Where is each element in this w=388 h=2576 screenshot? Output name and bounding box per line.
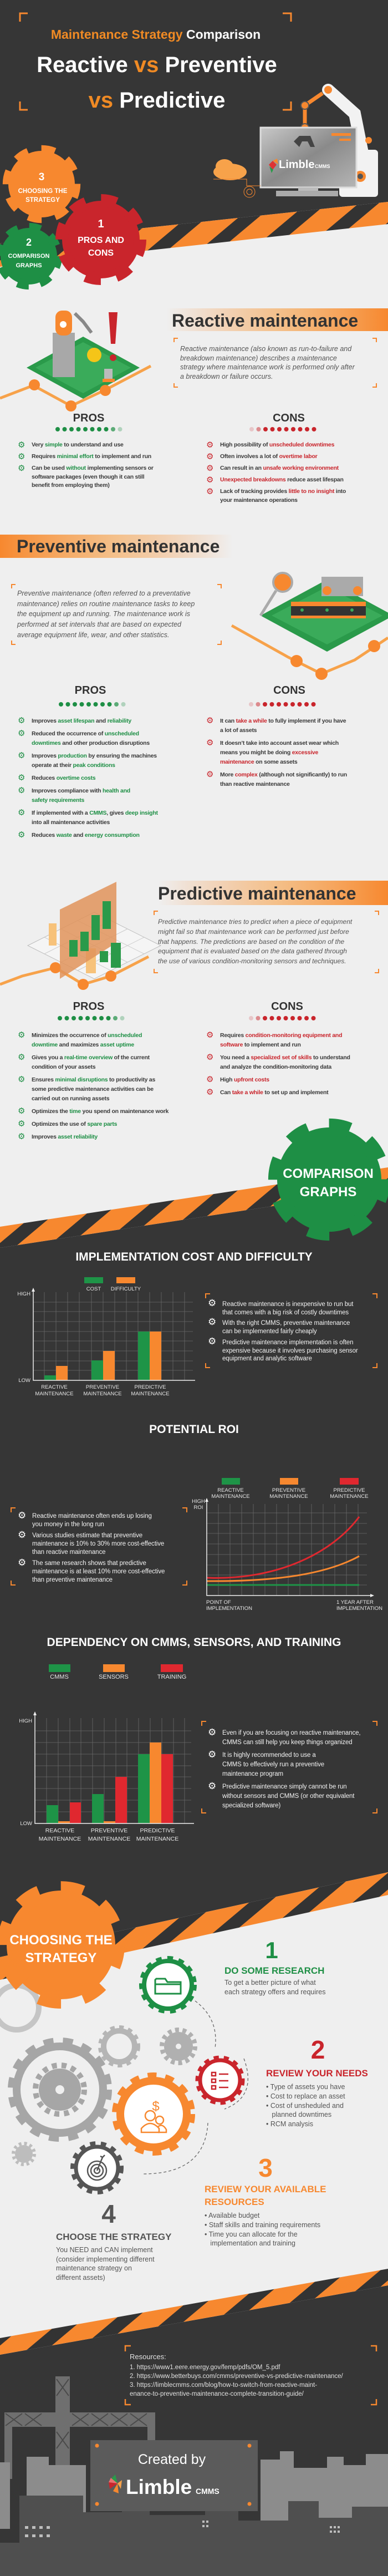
list: predictive pros: Minimizes the occurrence of unscheduled	[32, 1032, 142, 1039]
step 3: review your available resources	[205, 2153, 326, 2247]
callout: ROI notes: you money in the long run	[32, 1521, 104, 1528]
list: predictive pros: some predictive maintenance activities can be	[32, 1086, 154, 1093]
line chart: potential ROI: IMPLEMENTATION	[336, 1605, 382, 1612]
line chart: potential ROI: MAINTENANCE	[330, 1493, 369, 1500]
callout: dependency notes: specialized software)	[222, 1802, 280, 1809]
step 1: do some research	[224, 1937, 326, 1996]
line chart: potential ROI: PREVENTIVE	[272, 1487, 305, 1493]
step 3: review your available resources: 3	[258, 2153, 273, 2182]
dark header region	[0, 0, 388, 243]
bar chart: dependency on CMMS, sensors, training: REACTIVE	[45, 1827, 74, 1834]
list: preventive pros: Reduces overtime costs	[32, 775, 95, 781]
bar chart: dependency on CMMS, sensors, training: PREVENTIVE	[91, 1827, 127, 1834]
list: reactive cons: Unexpected breakdowns reduce asset lifespan	[220, 476, 344, 483]
text: reactive description: strategy where maintenance work is performed only after	[180, 363, 355, 371]
gear: comparison graphs (2): 2	[26, 237, 32, 248]
sign: created by Limble CMMS	[90, 2440, 258, 2511]
list: predictive pros: carried out on running assets	[32, 1095, 109, 1102]
step 1: do some research: each strategy offers and requires	[224, 1988, 326, 1996]
dots: predictive pros/cons	[58, 1016, 316, 1020]
list: preventive cons: It can take a while to fully implement if you have	[220, 718, 346, 724]
hazard stripe band 2	[0, 1167, 388, 1248]
list: preventive pros: into all maintenance activities	[32, 819, 110, 826]
bar chart: dependency on CMMS, sensors, training: HIGH	[19, 1718, 32, 1724]
heading bar: predictive	[158, 881, 388, 905]
list: predictive pros: downtime and maximizes asset uptime	[32, 1041, 134, 1048]
list: predictive pros: Gives you a real-time overview of the current	[32, 1054, 150, 1061]
step 4: choose the strategy	[56, 2199, 172, 2282]
callout: ROI notes: Various studies estimate that preventive	[32, 1532, 142, 1539]
callout: implementation notes: With the right CMMS, preventive maintenance	[222, 1320, 350, 1327]
text: predictive description: the use of various condition-monitoring sensors and techniques.	[158, 957, 346, 965]
callout: implementation notes: equipment and analytic software	[222, 1355, 312, 1362]
text: preventive description: maintenance) relies on routine maintenance tasks to keep	[17, 600, 195, 608]
list: preventive pros: Reduced the occurrence of unscheduled	[32, 730, 139, 737]
gear: pros and cons (1): CONS	[88, 248, 114, 258]
callout: implementation notes: that comes with a big risk of costly downtimes	[222, 1309, 349, 1316]
decorative gray gears: strategy	[0, 1985, 195, 2165]
list: reactive pros: software packages (even though it can still	[32, 474, 144, 480]
step 1: do some research: 1	[265, 1937, 278, 1963]
line chart: potential ROI: REACTIVE	[217, 1487, 244, 1493]
gear: comparison graphs (2): GRAPHS	[16, 262, 42, 269]
sign: created by Limble CMMS: CMMS	[196, 2487, 219, 2496]
text: reactive description	[180, 345, 355, 380]
gear: choosing the strategy (3): STRATEGY	[25, 197, 60, 204]
line chart: potential ROI: ROI	[194, 1505, 203, 1511]
step 2: review your needs: 2	[311, 2035, 325, 2064]
resources brackets	[125, 2346, 376, 2405]
list: preventive cons: a lot of assets	[220, 727, 257, 734]
callout: ROI notes	[19, 1512, 165, 1583]
step 4: choose the strategy: You NEED and CAN implement	[56, 2246, 153, 2254]
gear: choosing the strategy: STRATEGY	[25, 1950, 96, 1965]
callout: implementation notes: can be implemented fairly cheaply	[222, 1328, 317, 1335]
step 4: choose the strategy: different assets)	[56, 2274, 105, 2282]
callout: dependency notes: maintenance program	[222, 1771, 283, 1777]
heading: preventive cons: CONS	[273, 684, 305, 697]
gear: choosing the strategy	[6, 1890, 116, 2000]
list: reactive cons: Can result in an unsafe working environment	[220, 465, 339, 471]
list: preventive cons: More complex (although not significantly) to run	[220, 771, 347, 778]
callout: dependency notes	[208, 1728, 361, 1809]
description brackets: predictive	[154, 911, 379, 973]
gear: comparison graphs: COMPARISON	[283, 1166, 374, 1181]
text: predictive description: equipment that is evaluated based on the data gathered through	[158, 947, 347, 955]
list: reactive cons: High possibility of unscheduled downtimes	[220, 441, 334, 448]
list: predictive cons: software to implement and run	[220, 1041, 301, 1048]
callout: ROI notes: The same research shows that predictive	[32, 1560, 146, 1567]
title: maintenance strategy comparison: Maintenance Strategy Comparison	[51, 27, 261, 42]
illustration: robot arm and monitor	[213, 86, 378, 197]
list: predictive pros: condition of your assets	[32, 1064, 95, 1070]
step 4: choose the strategy: CHOOSE THE STRATEGY	[56, 2232, 171, 2242]
text: resources: Resources:	[130, 2353, 166, 2361]
step 2: review your needs: REVIEW YOUR NEEDS	[266, 2068, 368, 2079]
bar chart: dependency on CMMS, sensors, training: MAINTENANCE	[136, 1836, 178, 1842]
bar chart: implementation cost and difficulty: HIGH	[17, 1291, 30, 1297]
heading bar: preventive	[0, 535, 233, 558]
callout: ROI notes: maintenance is at least 10% more cost-effective	[32, 1568, 165, 1575]
callout: ROI notes: Reactive maintenance often ends up losing	[32, 1513, 152, 1520]
bar chart: implementation cost and difficulty: COST	[86, 1286, 101, 1292]
heading: predictive cons: CONS	[271, 1000, 303, 1013]
illustration: predictive chart	[0, 882, 161, 990]
step 2: review your needs	[266, 2035, 368, 2128]
callout: dependency notes: CMMS can still help you keep things organized	[222, 1739, 353, 1746]
line chart: potential ROI: MAINTENANCE	[269, 1493, 308, 1500]
list: preventive pros: Improves production by ensuring the machines	[32, 753, 157, 759]
bar chart: implementation cost and difficulty: MAINTENANCE	[131, 1391, 170, 1397]
hazard stripe band 3	[0, 1872, 388, 1980]
chart title: potential ROI: POTENTIAL ROI	[149, 1423, 239, 1436]
icon: choose strategy gear (target)	[73, 2144, 121, 2192]
callout: dependency notes: It is highly recommended to use a	[222, 1752, 316, 1759]
list: preventive cons: than reactive maintenance	[220, 781, 290, 787]
icon: review needs gear (red checklist)	[198, 2058, 242, 2102]
list: preventive pros: safety requirements	[32, 797, 84, 804]
text: preventive description: performed at set intervals that are based on expected	[17, 621, 181, 628]
hazard stripe band 4	[0, 2269, 388, 2355]
callout: dependency notes: Even if you are focusing on reactive maintenance,	[222, 1730, 361, 1736]
step 2: review your needs: • Cost to replace an asset	[266, 2092, 345, 2100]
text: resources	[130, 2353, 343, 2397]
list: reactive pros	[18, 441, 154, 489]
chart title: dependency: DEPENDENCY ON CMMS, SENSORS, AND TRAINING	[47, 1636, 341, 1649]
list: predictive pros: Optimizes the time you spend on maintenance work	[32, 1108, 169, 1115]
line chart: potential ROI: POINT OF	[206, 1599, 231, 1605]
list: predictive cons: You need a specialized set of skills to understand	[220, 1054, 350, 1061]
text: reactive description: a breakdown or failure occurs.	[180, 373, 273, 380]
list: predictive cons: High upfront costs	[220, 1076, 269, 1083]
illustration: reactive robot	[0, 311, 151, 411]
bar chart: dependency on CMMS, sensors, training: MAINTENANCE	[39, 1836, 81, 1842]
line chart: potential ROI	[192, 1478, 382, 1612]
title: reactive vs preventive vs predictive: vs Predictive	[89, 88, 225, 113]
illustration: preventive conveyor	[232, 573, 388, 680]
callout: implementation notes	[208, 1299, 358, 1362]
line chart: potential ROI: IMPLEMENTATION	[206, 1605, 252, 1612]
bar chart: dependency on CMMS, sensors, training	[19, 1664, 194, 1842]
step 3: review your available resources: • Time you can allocate for the	[205, 2230, 298, 2238]
heading: reactive cons: CONS	[273, 412, 305, 424]
text: reactive description: Reactive maintenance (also known as run-to-failure and	[180, 345, 351, 353]
list: predictive cons: Can take a while to set up and implement	[220, 1089, 328, 1096]
icon: research gear (green folder)	[142, 1959, 194, 2011]
text: preventive description: Preventive maintenance (often referred to a preventative	[17, 590, 191, 597]
bar chart: dependency on CMMS, sensors, training: LOW	[20, 1821, 32, 1827]
list: predictive cons	[207, 1032, 350, 1096]
step 2: review your needs: • Cost of unsheduled and	[266, 2102, 344, 2110]
callout: ROI notes: than reactive maintenance	[32, 1549, 105, 1556]
bar chart: dependency on CMMS, sensors, training: MAINTENANCE	[88, 1836, 130, 1842]
title corner brackets	[20, 13, 291, 110]
text: predictive description: might fail so that maintenance work can be performed just before	[158, 928, 349, 936]
illustration: robot arm and monitor: Limble	[279, 159, 314, 171]
list: preventive pros: Improves asset lifespan and reliability	[32, 718, 131, 724]
step 3: review your available resources: REVIEW YOUR AVAILABLE	[205, 2184, 326, 2194]
step 2: review your needs: • RCM analysis	[266, 2120, 313, 2128]
bar chart: implementation cost and difficulty: PREDICTIVE	[134, 1384, 166, 1390]
text: resources: enance-to-preventive-maintenance-complete-transition-guide/	[130, 2391, 304, 2397]
gear: choosing the strategy (3): CHOOSING THE	[18, 188, 68, 195]
step 3: review your available resources: • Staff skills and training requirements	[205, 2221, 320, 2229]
step 3: review your available resources: RESOURCES	[205, 2197, 264, 2207]
list: reactive cons: Often involves a lot of overtime labor	[220, 453, 317, 460]
sign: created by Limble CMMS: Limble	[126, 2476, 192, 2498]
gear: pros and cons (1): 1	[98, 218, 104, 230]
list: reactive cons	[207, 441, 346, 504]
gear: pros and cons (1)	[62, 201, 140, 278]
list: preventive pros: operate at their peak conditions	[32, 762, 115, 769]
line chart: potential ROI: HIGH	[192, 1498, 205, 1505]
icon: resources gear (orange people)	[116, 2076, 191, 2152]
illustration: robot arm and monitor: CMMS	[315, 164, 330, 169]
text: preventive description: the equipment up and running. The maintenance work is	[17, 610, 190, 618]
gear: comparison graphs	[277, 1127, 382, 1232]
bar chart: implementation cost and difficulty: MAINTENANCE	[83, 1391, 122, 1397]
list: predictive pros: Optimizes the use of spare parts	[32, 1121, 117, 1127]
heading: reactive pros: PROS	[73, 412, 104, 424]
list: reactive cons: your maintenance operations	[220, 497, 298, 504]
heading: reactive maintenance: Reactive maintenance	[172, 311, 358, 331]
gear: choosing the strategy: CHOOSING THE	[9, 1933, 113, 1948]
chart title: implementation cost and difficulty: IMPLEMENTATION COST AND DIFFICULTY	[75, 1251, 313, 1263]
callout brackets: ROI	[11, 1508, 187, 1585]
arrows: dashed flow between steps	[143, 2001, 248, 2174]
list: preventive pros	[18, 717, 158, 839]
list: preventive cons: maintenance on some assets	[220, 759, 297, 765]
list: predictive pros: Ensures minimal disruptions to productivity as	[32, 1076, 155, 1083]
description brackets: reactive	[174, 338, 376, 387]
step 2: review your needs: planned downtimes	[272, 2111, 331, 2118]
heading bar: reactive	[166, 308, 388, 331]
list: reactive pros: benefit from employing them)	[32, 482, 110, 489]
text: preventive description: average equipment life, wear, and other statistics.	[17, 631, 169, 639]
list: reactive pros: Very simple to understand and use	[32, 441, 124, 448]
list: preventive pros: Improves compliance with health and	[32, 787, 130, 794]
bar chart: dependency on CMMS, sensors, training: TRAINING	[157, 1674, 186, 1680]
bar chart: dependency on CMMS, sensors, training: CMMS	[50, 1674, 69, 1680]
list: preventive cons: means you might be doing excessive	[220, 749, 318, 756]
list: preventive pros: Reduces waste and energy consumption	[32, 832, 140, 839]
text: resources: 1. https://www1.eere.energy.gov/femp/pdfs/OM_5.pdf	[130, 2364, 280, 2371]
text: predictive description: that happens. The predictions are based on the condition of the	[158, 938, 344, 946]
dots: reactive pros/cons	[55, 427, 316, 431]
text: predictive description	[158, 918, 353, 965]
list: reactive pros: Requires minimal effort to implement and run	[32, 453, 151, 460]
hazard stripe band 1	[0, 202, 388, 267]
gear: pros and cons (1): PROS AND	[78, 236, 124, 245]
text: predictive description: Predictive maintenance tries to predict when a piece of equipment	[158, 918, 352, 926]
step 4: choose the strategy: maintenance strategy on	[56, 2264, 132, 2272]
title: reactive vs preventive vs predictive: Reactive vs Preventive	[37, 53, 277, 77]
list: predictive cons: and analyze the condition-monitoring data	[220, 1064, 331, 1070]
bar chart: implementation cost and difficulty	[17, 1277, 195, 1397]
line chart: potential ROI: 1 YEAR AFTER	[336, 1599, 374, 1605]
list: reactive pros: Can be used without implementing sensors or	[32, 465, 154, 471]
callout brackets: implementation	[206, 1294, 377, 1368]
callout: dependency notes: without sensors and CMMS (or other equivalent	[222, 1793, 354, 1800]
gear: comparison graphs: GRAPHS	[300, 1185, 356, 1200]
text: resources: 3. https://limblecmms.com/blog/how-to-switch-from-reactive-maint-	[130, 2382, 317, 2389]
bar chart: dependency on CMMS, sensors, training: SENSORS	[99, 1674, 129, 1680]
heading: predictive pros: PROS	[73, 1000, 104, 1013]
step 1: do some research: DO SOME RESEARCH	[224, 1965, 324, 1976]
step 1: do some research: To get a better picture of what	[224, 1979, 316, 1986]
bar chart: implementation cost and difficulty: DIFFICULTY	[111, 1286, 141, 1292]
list: reactive cons: Lack of tracking provides little to no insight into	[220, 488, 346, 495]
dots: preventive pros/cons	[59, 702, 316, 707]
step 2: review your needs: • Type of assets you have	[266, 2083, 345, 2091]
bar chart: implementation cost and difficulty: MAINTENANCE	[35, 1391, 74, 1397]
gear: comparison graphs (2): COMPARISON	[8, 253, 50, 260]
callout: ROI notes: than preventive maintenance	[32, 1577, 113, 1583]
text: resources: 2. https://www.betterbuys.com/cmms/preventive-vs-predictive-maintenance/	[130, 2373, 343, 2380]
gear: comparison graphs (2)	[0, 227, 58, 285]
illustration: city skyline and crane	[0, 2376, 388, 2576]
description brackets: preventive	[12, 585, 221, 644]
list: preventive pros: If implemented with a CMMS, gives deep insight	[32, 810, 158, 816]
bar chart: implementation cost and difficulty: LOW	[18, 1378, 30, 1384]
line chart: potential ROI: MAINTENANCE	[211, 1493, 250, 1500]
bar chart: implementation cost and difficulty: REACTIVE	[41, 1384, 68, 1390]
bar chart: dependency on CMMS, sensors, training: PREDICTIVE	[140, 1827, 175, 1834]
text: reactive description: breakdown maintenance) describes a maintenance	[180, 354, 337, 362]
step 3: review your available resources: implementation and training	[210, 2239, 295, 2247]
gear: choosing the strategy (3)	[8, 151, 75, 217]
dark comparison region	[0, 1188, 388, 1957]
step 4: choose the strategy: 4	[101, 2199, 116, 2228]
list: predictive cons: Requires condition-monitoring equipment and	[220, 1032, 342, 1039]
list: preventive cons: It doesn’t take into account asset wear which	[220, 740, 339, 746]
callout: implementation notes: Predictive maintenance implementation is often	[222, 1339, 353, 1346]
heading: predictive maintenance: Predictive maintenance	[158, 883, 356, 903]
sign: created by Limble CMMS: Created by	[138, 2452, 206, 2467]
dark footer region	[0, 2285, 388, 2576]
line chart: potential ROI: PREDICTIVE	[333, 1487, 365, 1493]
callout: dependency notes: CMMS to effectively run a preventive	[222, 1761, 324, 1768]
gear: choosing the strategy (3): 3	[39, 171, 44, 183]
heading: preventive maintenance: Preventive maintenance	[17, 536, 219, 556]
bar chart: implementation cost and difficulty: PREVENTIVE	[86, 1384, 119, 1390]
callout: dependency notes: Predictive maintenance simply cannot be run	[222, 1784, 347, 1790]
text: preventive description	[17, 590, 195, 639]
callout brackets: dependency	[202, 1721, 377, 1813]
icon: resources gear (orange people): $	[152, 2099, 160, 2114]
step 4: choose the strategy: (consider implementing different	[56, 2255, 155, 2263]
title: reactive vs preventive vs predictive	[37, 53, 277, 113]
callout: ROI notes: maintenance is 10% to 30% more cost-effective	[32, 1541, 164, 1547]
heading: preventive pros: PROS	[75, 684, 106, 697]
callout: implementation notes: expensive because it involves purchasing sensor	[222, 1348, 358, 1354]
step 3: review your available resources: • Available budget	[205, 2212, 259, 2219]
callout: implementation notes: Reactive maintenance is inexpensive to run but	[222, 1301, 353, 1308]
list: preventive pros: downtimes and other production disruptions	[32, 740, 150, 746]
list: predictive pros: Improves asset reliability	[32, 1134, 98, 1140]
list: predictive pros	[18, 1032, 169, 1140]
list: preventive cons	[207, 717, 347, 787]
